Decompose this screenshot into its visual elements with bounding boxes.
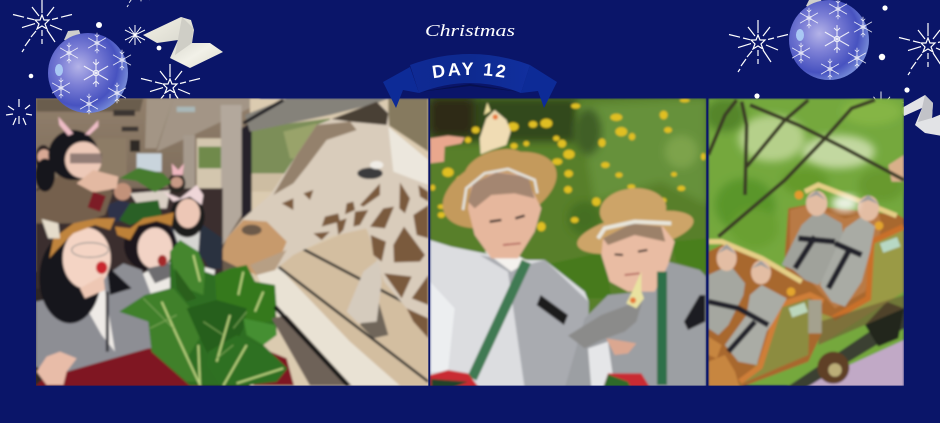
sparkle: top left large: [13, 0, 72, 52]
right hat lining: [598, 222, 671, 238]
track: [785, 302, 904, 388]
right boy head: [601, 223, 675, 292]
banner label: DAY 12: [432, 62, 506, 78]
photo panel: giraffe feeding on safari bus: [33, 95, 430, 392]
cream parrot on hat: [480, 102, 511, 154]
lower car: [708, 242, 823, 388]
foliage background: [430, 98, 706, 315]
monk children, lower car: [708, 244, 787, 365]
big bunch of chard leaves: [119, 240, 287, 386]
girl with giraffe headband, center: [115, 212, 215, 308]
sparkle: right of ornament, partly hidden: [859, 92, 904, 130]
ornament: right blue bauble: [789, 0, 872, 80]
lower right ground: [798, 340, 904, 388]
bus interior: [33, 95, 270, 392]
window pillar: [221, 98, 388, 247]
snow dots: [29, 5, 910, 99]
outside view: sand, trees and sky: [250, 98, 430, 388]
giraffe head and neck: [220, 102, 428, 338]
lens flare: [832, 195, 858, 212]
sparkle: top small clipped: [121, 0, 162, 7]
leaf behind: [119, 200, 162, 225]
tree foliage background: [705, 98, 905, 386]
photo panel: child monks on roller coaster: [705, 98, 905, 388]
sparkle: left small: [6, 99, 32, 125]
girl in plaid shirt: [163, 185, 223, 270]
yellow flowers: [430, 98, 706, 231]
uniform patch: [537, 295, 568, 325]
sparkle: far right: [899, 23, 940, 75]
leaf held in hand: [119, 168, 172, 192]
sparkle: small flake: [125, 25, 145, 45]
banner ribbon: [383, 54, 557, 108]
tree branches: [708, 100, 904, 237]
back passengers: [35, 145, 223, 288]
strap right: [656, 270, 668, 386]
right boy straw hat: [576, 186, 695, 256]
side window scene: [195, 136, 222, 190]
sparkle: under ribbon: [141, 64, 200, 116]
red seat back: [36, 348, 294, 388]
red bags: [430, 370, 651, 388]
monk children, upper car: [782, 191, 879, 307]
third car front: [708, 337, 740, 388]
christmas script heading: Christmas: [425, 21, 515, 40]
ribbon: right silver: [900, 95, 940, 136]
raised hand: [430, 136, 465, 163]
photo panel: two child monks with parrots: [430, 98, 706, 388]
left boy head: [468, 172, 541, 258]
leg post: [347, 258, 382, 323]
window rails: [276, 248, 428, 384]
green strap: [472, 262, 526, 378]
upper car: [785, 185, 904, 345]
woman with bunny ears feeding leaf: [35, 117, 118, 223]
left boy uniform: [430, 240, 589, 388]
right boy uniform: [565, 262, 706, 388]
front woman: [36, 216, 153, 373]
sparkle: top right left side: [729, 20, 788, 72]
ribbon: left silver: [143, 17, 223, 68]
ornament: left blue bauble: [48, 30, 131, 114]
hat lining: [463, 169, 537, 210]
grey parrot on hand: [568, 272, 644, 355]
window frame bottom: [272, 307, 352, 386]
hand on seat: [37, 352, 77, 385]
left boy straw hat: [441, 147, 558, 230]
